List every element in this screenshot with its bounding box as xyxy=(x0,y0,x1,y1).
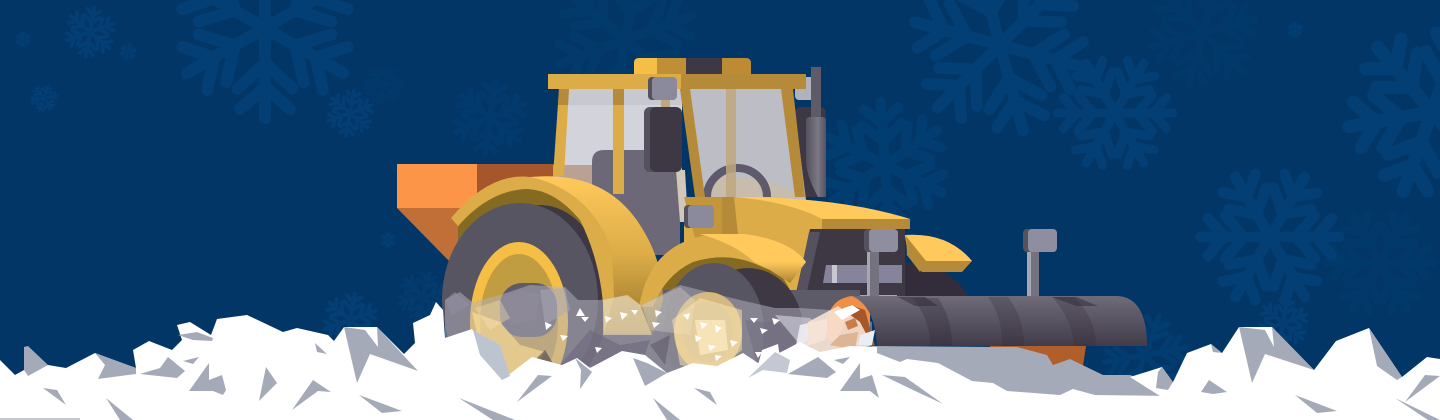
exhaust and rear cab block xyxy=(795,67,826,197)
snow shards grey xyxy=(0,327,1440,420)
plow blade mouth with snow xyxy=(808,296,875,357)
cab pillars xyxy=(553,89,805,197)
dashboard xyxy=(704,176,800,197)
tractor body and hood xyxy=(684,197,910,290)
plow blade xyxy=(852,296,1147,346)
lower grey mirror xyxy=(684,205,714,228)
front fender xyxy=(639,234,806,307)
undercarriage behind spray xyxy=(560,290,860,380)
mirror arm xyxy=(661,100,670,108)
snow grey under the plow xyxy=(870,346,1195,398)
seat xyxy=(592,150,680,255)
plow markers xyxy=(864,229,1057,252)
grille xyxy=(795,229,905,299)
front wheel arch underside xyxy=(650,246,790,305)
headlight fender xyxy=(905,235,972,272)
window stripe xyxy=(726,89,736,197)
main snow drift xyxy=(0,302,1440,420)
rear wheel xyxy=(442,203,608,402)
upper grey mirror xyxy=(648,77,677,100)
light grey wedge below rear wheel xyxy=(473,330,510,380)
front wheel xyxy=(664,263,803,397)
rear fender xyxy=(451,176,663,333)
right snow drift xyxy=(1130,327,1440,420)
cab windows xyxy=(553,89,806,205)
rear wheel arch underside xyxy=(458,188,620,290)
cab roof xyxy=(548,74,806,89)
large side mirror xyxy=(644,107,682,172)
light grey chunk near front wheel xyxy=(748,352,790,378)
plow posts xyxy=(867,250,1039,298)
snow spray around wheels xyxy=(445,285,872,388)
steering wheel xyxy=(707,168,767,197)
sliver of light behind door xyxy=(676,170,688,222)
beacon light bar xyxy=(634,58,751,74)
plow base orange xyxy=(990,340,1087,372)
far front wheel xyxy=(902,263,968,300)
salt hopper xyxy=(397,164,567,262)
